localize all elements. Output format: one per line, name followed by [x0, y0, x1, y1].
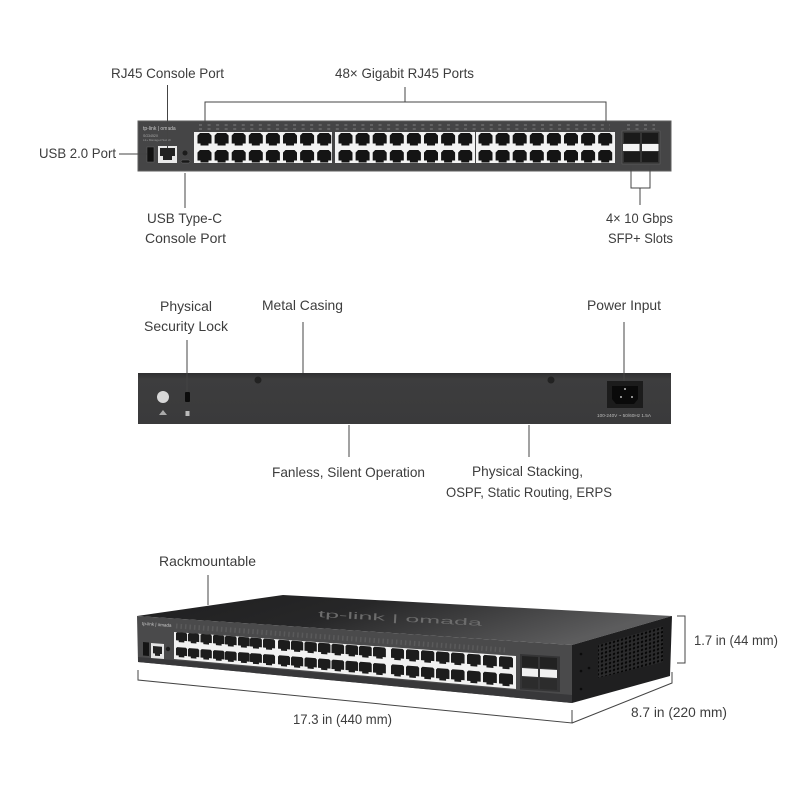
ground symbol: [159, 410, 167, 415]
RJ45 port block: [194, 132, 615, 163]
label: physical security lock: [144, 298, 229, 334]
SFP+ cages in perspective: [520, 654, 560, 692]
reset button: [182, 150, 188, 156]
label: SFP+ slots: 4× 10 Gbps: [606, 210, 673, 226]
model text: SG3452X: [143, 134, 159, 138]
reset hole: [166, 647, 170, 651]
RJ45 ports in perspective: [176, 632, 513, 687]
label: SFP+ slots: [606, 210, 673, 246]
front logo: tp-link | omada: [142, 621, 172, 628]
label: physical security lock: Physical: [160, 298, 212, 314]
chassis: [138, 373, 671, 424]
panel: switch perspective view: [137, 595, 672, 703]
USB port: [147, 147, 154, 162]
dimension: width: [138, 670, 572, 727]
label: RJ45 console port: RJ45 Console Port: [111, 65, 224, 81]
label: physical security lock: Security Lock: [144, 318, 229, 334]
callout line: rackmountable: [207, 575, 209, 605]
label: stacking and routing: Physical Stacking,: [472, 463, 583, 479]
label: rackmountable: Rackmountable: [159, 553, 256, 569]
label: 48 gigabit RJ45 ports: 48× Gigabit RJ45 Ports: [335, 65, 474, 81]
panel: switch front view: [138, 121, 671, 171]
label: SFP+ slots: SFP+ Slots: [608, 230, 673, 246]
label: USB Type-C console port: Console Port: [145, 230, 226, 246]
callout lines: front view: [119, 85, 650, 208]
USB port: [143, 642, 149, 656]
label: fanless: Fanless, Silent Operation: [272, 464, 425, 480]
lock symbol: [186, 411, 190, 416]
lock slot: [185, 392, 190, 402]
RJ45 console socket: [151, 643, 164, 659]
callout lines: rear view: [187, 322, 624, 457]
SFP+ cages: [622, 131, 660, 164]
side surface: [572, 616, 672, 703]
model text: [143, 134, 171, 142]
status LEDs: [199, 125, 655, 129]
screws: [254, 376, 554, 384]
label: stacking and routing: [446, 463, 612, 500]
logo: tp-link | omada: [143, 126, 176, 132]
dimension: height: [677, 616, 778, 663]
LED rows: [176, 626, 505, 650]
dimension: height: 1.7 in (44 mm): [694, 632, 778, 648]
label: USB Type-C console port: [145, 210, 226, 246]
ground screw: [157, 391, 169, 403]
side vents: [598, 626, 663, 678]
RJ45 console socket: [158, 146, 177, 163]
dimension: width: 17.3 in (440 mm): [293, 711, 392, 727]
power socket: [607, 381, 643, 408]
dimension: depth: 8.7 in (220 mm): [631, 704, 727, 720]
dimension: depth: [572, 672, 727, 723]
chassis: [138, 121, 671, 171]
side mounting holes: [580, 653, 590, 690]
top logo: tp-link | omada: [318, 609, 484, 629]
label: stacking and routing: OSPF, Static Routing, ERPS: [446, 484, 612, 500]
power rating: 100-240V ~ 50/60Hz 1.5A: [597, 413, 652, 418]
label: USB 2.0 port: USB 2.0 Port: [39, 145, 116, 161]
panel: switch rear view: [138, 373, 671, 424]
top surface: [137, 595, 672, 645]
port block: [174, 632, 516, 689]
USB-C port: [181, 160, 190, 163]
label: metal casing: Metal Casing: [262, 297, 343, 313]
front bottom edge: [138, 657, 572, 703]
front face: [137, 616, 572, 703]
label: power input: Power Input: [587, 297, 661, 313]
label: USB Type-C console port: USB Type-C: [147, 210, 222, 226]
model text: L2+ Managed Switch: [143, 138, 171, 142]
